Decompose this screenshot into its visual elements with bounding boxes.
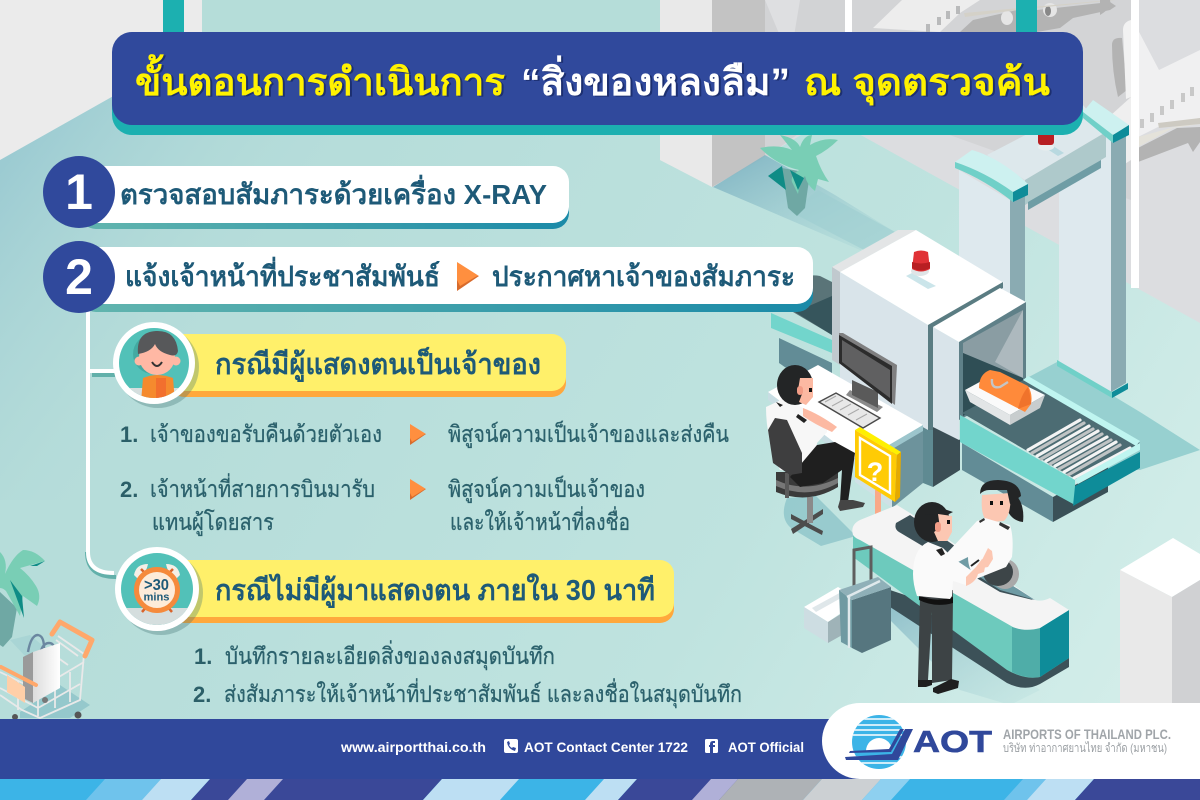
title text: ณ จุดตรวจค้น [804,62,1050,106]
icon: smiling person [119,328,189,398]
case 1 list: พิสูจน์ความเป็นเจ้าของและส่งคืน [448,419,729,448]
title text: “สิ่งของหลงลืม” [523,56,792,105]
case 2 heading [115,547,674,635]
step 1: 1 [65,164,93,220]
title text: ขั้นตอนการดำเนินการ [137,55,508,105]
footer stripes [0,779,1200,800]
case 2 list: บันทึกรายละเอียดสิ่งของลงสมุดบันทึก [225,640,555,670]
airplane one in window [873,0,1116,40]
case 1 list: และให้เจ้าหน้าที่ลงชื่อ [450,506,630,535]
plant shadow on floor [713,155,895,250]
icon: alarm clock [121,553,193,625]
case 2 list: ส่งสัมภาระให้เจ้าหน้าที่ประชาสัมพันธ์ และลงชื่อในสมุดบันทึก [224,678,742,708]
question sign [855,427,901,529]
icon: alarm clock: mins [144,592,170,604]
case 1 list [120,419,729,536]
monitor and keyboard [819,333,897,428]
case 2 list: 1. [194,644,212,669]
tray with orange bag [965,370,1045,425]
case 1 list: พิสูจน์ความเป็นเจ้าของ [448,474,645,503]
icon: facebook [705,739,718,753]
icon: alarm clock: >30 [144,577,169,594]
icon: phone [504,739,518,753]
AOT logo emblem [845,714,913,770]
seated officer [766,365,865,546]
arrow [410,424,426,445]
shopping cart [0,622,92,720]
airplane two in window [1100,0,1200,288]
step 1 [43,156,569,229]
case 1 list: 2. [120,477,138,502]
case 1 heading: กรณีมีผู้แสดงตนเป็นเจ้าของ [215,346,541,382]
arrow [457,262,479,291]
conveyor with rollers [960,376,1140,522]
website: www.airportthai.co.th [340,739,486,755]
case 2 list: 2. [193,682,211,707]
footer band: AOT Official [728,739,804,755]
plant top right [760,135,895,250]
x-ray machine [832,230,1026,487]
step 2: แจ้งเจ้าหน้าที่ประชาสัมพันธ์ [125,256,440,292]
metal detector arch [955,100,1200,470]
male officer [913,502,986,694]
logo panel: AOT [913,724,992,759]
box and suitcase [804,547,891,653]
step 2: 2 [65,249,93,305]
title text: “สิ่งของหลงลืม” [521,55,790,104]
case 1 list: เจ้าหน้าที่สายการบินมารับ [150,473,375,502]
white block bottom right [1120,538,1200,710]
title text [135,54,1052,107]
case 1 list: เจ้าของขอรับคืนด้วยตัวเอง [150,421,382,447]
case 1 list: แทนผู้โดยสาร [152,509,274,536]
arrow [410,479,426,500]
step 2: ประกาศหาเจ้าของสัมภาระ [492,261,795,292]
title text: ณ จุดตรวจค้น [806,63,1052,107]
title text: ขั้นตอนการดำเนินการ [135,54,506,104]
step 1: ตรวจสอบสัมภาระด้วยเครื่อง X-RAY [120,174,547,210]
left conveyor [771,275,832,400]
step 2 [43,241,813,313]
counter and staff [852,505,1069,705]
female officer [947,480,1023,589]
desk [768,365,923,508]
left plant [0,550,60,672]
case 2 heading: กรณีไม่มีผู้มาแสดงตน ภายใน 30 นาที [215,573,655,608]
connector line [87,305,116,577]
case 1 heading [113,322,566,408]
title panel [112,32,1083,135]
case 1 list: 1. [120,422,138,447]
question sign: ? [867,457,883,487]
logo panel [822,703,1200,779]
case 2 list [193,640,742,708]
footer band [0,719,1200,800]
footer band: AOT Contact Center 1722 [524,739,688,755]
